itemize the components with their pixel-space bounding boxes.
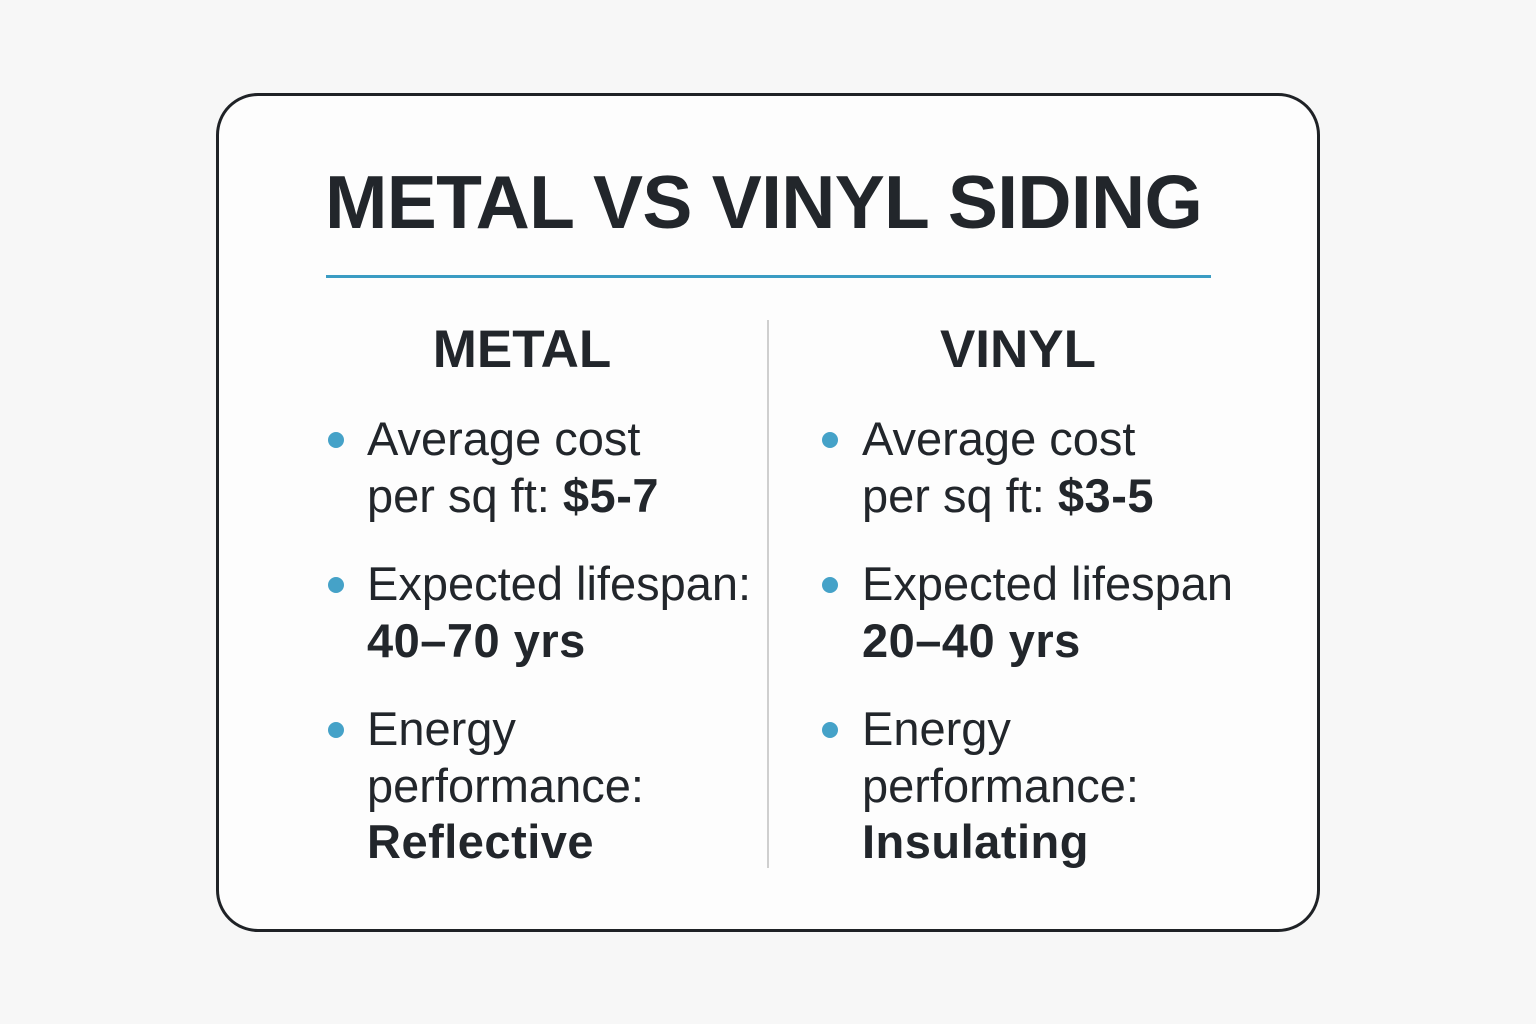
- icon: bullet metal 1: [328, 432, 344, 448]
- text: metal cost: per sq ft: $5-7: [367, 468, 659, 522]
- text: metal energy: performance:: [367, 758, 644, 812]
- text: vinyl energy: Energy: [862, 702, 1011, 755]
- text: vinyl cost: per sq ft: $3-5: [862, 468, 1154, 522]
- text: metal energy: Energy: [367, 702, 516, 755]
- text: metal energy: [367, 702, 644, 868]
- text: metal cost: Average cost: [367, 412, 640, 465]
- icon: bullet metal 3: [328, 722, 344, 738]
- text: vinyl energy: performance:: [862, 758, 1139, 812]
- icon: bullet vinyl 3: [822, 722, 838, 738]
- heading: vinyl: VINYL: [940, 320, 1096, 379]
- text: vinyl lifespan: 20–40 yrs: [862, 614, 1081, 666]
- text: vinyl lifespan: Expected lifespan: [862, 557, 1233, 610]
- text: metal lifespan: [367, 557, 751, 667]
- text: metal cost: [367, 412, 659, 522]
- icon: bullet metal 2: [328, 577, 344, 593]
- heading: metal: METAL: [433, 320, 611, 379]
- title: METAL VS VINYL SIDING: [325, 160, 1202, 244]
- text: metal lifespan: Expected lifespan:: [367, 557, 751, 610]
- text: metal energy: Reflective: [367, 815, 594, 868]
- column divider: [767, 320, 769, 868]
- icon: bullet vinyl 2: [822, 577, 838, 593]
- icon: bullet vinyl 1: [822, 432, 838, 448]
- text: vinyl cost: Average cost: [862, 412, 1135, 465]
- title underline: [326, 275, 1211, 278]
- panel: comparison card: [216, 93, 1320, 932]
- text: metal lifespan: 40–70 yrs: [367, 614, 586, 666]
- text: vinyl lifespan: [862, 557, 1233, 667]
- text: vinyl energy: Insulating: [862, 815, 1089, 868]
- text: vinyl energy: [862, 702, 1139, 868]
- text: vinyl cost: [862, 412, 1154, 522]
